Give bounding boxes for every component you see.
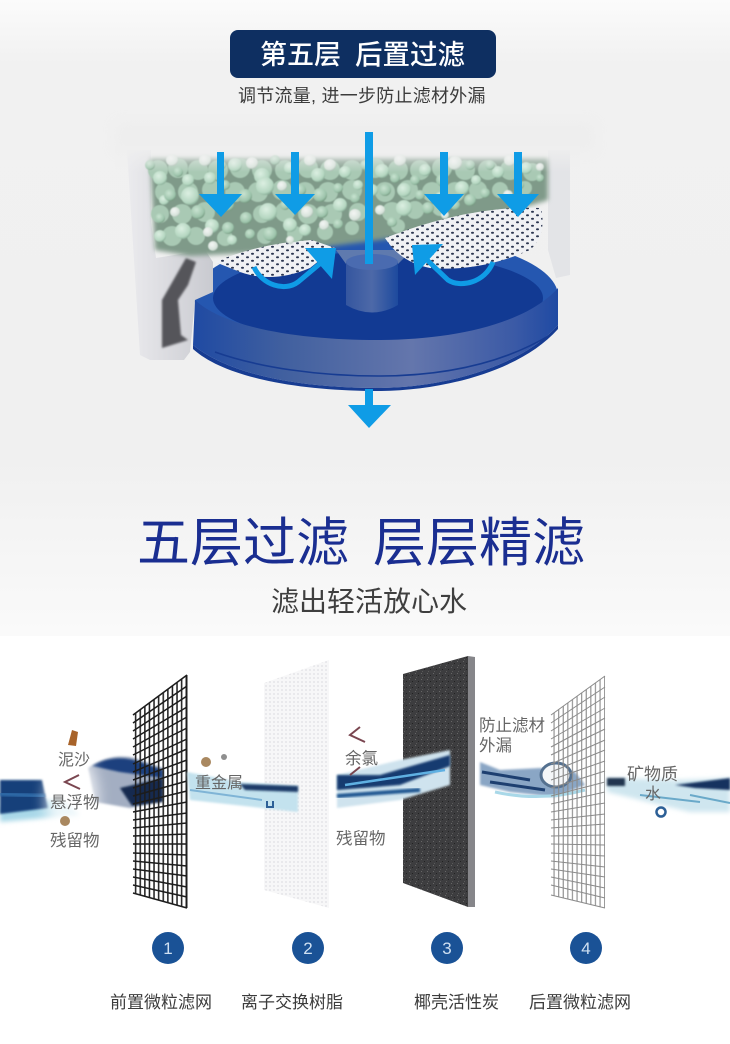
caption 1: 前置微粒滤网 <box>110 993 212 1012</box>
step badges <box>152 932 602 964</box>
label: silt: 泥沙 <box>58 751 90 769</box>
filter mesh 4 <box>551 676 605 908</box>
arrow: centre shaft <box>365 132 373 264</box>
water stream: before mesh 1 <box>88 756 163 808</box>
dish inner floor <box>213 252 543 344</box>
icon: residue left <box>60 816 70 826</box>
lower section: filtration stages <box>0 656 730 908</box>
heading badge: layer five <box>230 30 496 78</box>
perforated disc right <box>385 208 543 269</box>
collar behind post <box>336 250 412 264</box>
label: water: 水 <box>645 785 661 803</box>
label: prevent leakage: 防止滤材 <box>479 716 545 735</box>
label: leakage line 2: 外漏 <box>479 736 512 755</box>
label halo left <box>46 752 98 848</box>
water stream: after mesh 1 <box>187 772 298 812</box>
fade over top of pebbles and walls <box>115 146 580 172</box>
diagram: cartridge cross-section <box>115 122 595 428</box>
badge 3: 3 <box>442 939 452 958</box>
icon: sediment <box>68 730 78 746</box>
label: residue right: 残留物 <box>336 829 386 848</box>
secondary title: 滤出轻活放心水 <box>271 586 467 617</box>
heading badge: layer five: 后置过滤 <box>355 39 465 70</box>
label: chlorine: 余氯 <box>345 749 378 768</box>
water stream: bubble <box>480 762 585 797</box>
arrow: down 4 <box>497 152 539 217</box>
water stream: outlet <box>607 778 730 816</box>
badge 2 <box>292 932 324 964</box>
arrow: down 3 <box>424 152 464 216</box>
background: upper grey section <box>0 0 730 636</box>
filter panel 3 <box>403 656 475 907</box>
badge 2: 2 <box>303 939 313 958</box>
main title: 层层精滤 <box>373 514 585 573</box>
caption 3: 椰壳活性炭 <box>414 993 499 1012</box>
cartridge left wall <box>127 150 213 360</box>
main title <box>137 514 585 573</box>
icon: heavy metal <box>201 754 227 767</box>
badge 1 <box>152 932 184 964</box>
water stream: inlet <box>0 780 80 822</box>
filter panel 2 <box>264 660 329 908</box>
icon: chlorine squiggle <box>350 727 365 775</box>
arrow: outlet <box>348 389 391 428</box>
cartridge top fade <box>115 122 595 152</box>
water stream: through panel 3 <box>337 750 450 808</box>
cartridge right wall <box>548 150 570 278</box>
badge 1: 1 <box>163 939 173 958</box>
dish front band <box>193 288 558 391</box>
pebbles <box>145 154 544 251</box>
arrow: curved right <box>412 244 493 284</box>
label: heavy metal: 重金属 <box>195 774 243 792</box>
subtitle under badge: 调节流量, 进一步防止滤材外漏 <box>238 86 486 106</box>
wall inner cavity <box>162 258 196 348</box>
pebbles: back layer <box>148 158 541 246</box>
caption 4: 后置微粒滤网 <box>529 993 631 1012</box>
main title: 五层过滤 <box>137 514 349 573</box>
badge 4: 4 <box>581 939 591 958</box>
arrow: down 1 <box>199 152 242 217</box>
perforated disc left <box>215 240 335 277</box>
icon: suspended squiggle left <box>65 775 80 789</box>
dish back rim <box>194 234 558 358</box>
label: residue left: 残留物 <box>50 831 100 850</box>
filter mesh 1 <box>133 675 188 908</box>
pebble base <box>150 158 548 256</box>
arrow: curved left <box>254 248 336 287</box>
label: mineral: 矿物质 <box>627 765 678 784</box>
badge 4 <box>570 932 602 964</box>
label: suspended matter: 悬浮物 <box>50 793 100 812</box>
center post <box>346 254 398 312</box>
heading badge: layer five: 第五层 <box>260 40 341 70</box>
caption 2: 离子交换树脂 <box>241 993 343 1012</box>
arrow: down 2 <box>275 152 315 215</box>
badge 3 <box>431 932 463 964</box>
